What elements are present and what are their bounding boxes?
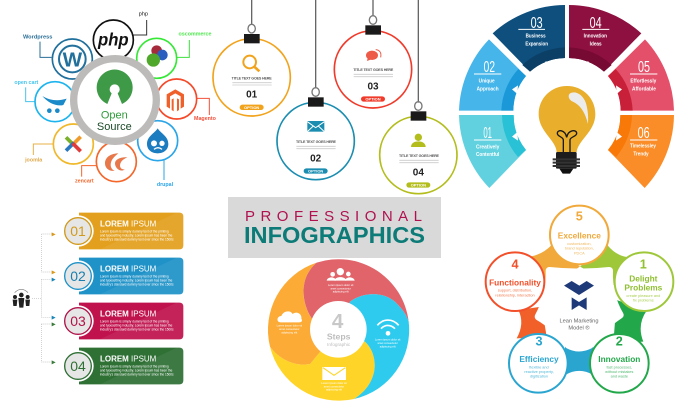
node 5: excellence: brand reputation, [565, 247, 594, 251]
node: wordpress: W [63, 49, 83, 72]
node: open cart: open cart [14, 80, 39, 86]
list item 03: Lorem Ipsum is simply dummy text of the printing [100, 320, 169, 324]
node 4: functionality [486, 252, 544, 311]
list item 01: industry's standard dummy text ever since the 1500s [100, 238, 174, 242]
step: orange cloud: adipiscing elit [281, 330, 298, 334]
list item 03: industry's standard dummy text ever since the 1500s [100, 328, 174, 332]
segment labels: 01 [483, 125, 492, 142]
step: yellow envelope: Lorem ipsum dolor sit [321, 381, 347, 385]
node 4: functionality: 4 [511, 257, 519, 271]
list item 01: LOREM IPSUM [100, 220, 156, 229]
center label: 4 steps [310, 301, 367, 358]
hanging circle 02: TITLE TEXT GOES HERE [296, 140, 337, 144]
segment labels: 04 [590, 15, 602, 32]
node 2: innovation [590, 334, 649, 393]
segment 06 [608, 115, 674, 188]
node: php: php [139, 12, 148, 18]
hanging circle 03 [334, 0, 412, 108]
hanging circle 01: OPTION [244, 105, 259, 110]
segment labels: Approach [477, 86, 499, 92]
segment labels: Expansion [525, 41, 548, 47]
list item 04: Lorem Ipsum is simply dummy text of the printing [100, 365, 169, 369]
segment labels: Innovation [584, 33, 607, 39]
hanging circle 04: 04 [413, 167, 424, 178]
center label: 4 steps: 4 [332, 310, 344, 333]
segment labels: Contentful [476, 152, 500, 158]
step: yellow envelope: adipiscing elit [326, 388, 342, 392]
node 4: functionality: relationship, interaction [495, 293, 535, 297]
node: zencart: zencart [75, 179, 94, 185]
list item 04: LOREM IPSUM [100, 355, 156, 364]
step: yellow envelope: amet consectetur [324, 384, 344, 388]
node 2: innovation: Innovation [598, 354, 640, 364]
segment 04 [569, 5, 641, 72]
node 5: excellence: PDCA [574, 251, 585, 255]
segment labels [474, 15, 657, 158]
hanging circle 04 [380, 0, 457, 194]
node: wordpress: Wordpress [23, 35, 52, 41]
list item 03 [62, 303, 183, 339]
title banner: INFOGRAPHICS [244, 222, 425, 248]
list item 02: 02 [70, 268, 86, 284]
list item 04: industry's standard dummy text ever since the 1500s [100, 373, 174, 377]
hanging circle 04: TITLE TEXT GOES HERE [399, 154, 440, 158]
connector bands [517, 245, 647, 375]
hanging circle 03: TITLE TEXT GOES HERE [353, 68, 394, 72]
segment labels: Timelessley [630, 144, 656, 150]
segment labels: 03 [531, 15, 543, 32]
list item 04 [62, 348, 183, 384]
node: magento: Magento [194, 116, 217, 122]
center: open source badge: Source [97, 121, 132, 133]
list item 02: industry's standard dummy text ever since the 1500s [100, 283, 174, 287]
list item 01: Lorem Ipsum is simply dummy text of the printing [100, 230, 169, 234]
node: oscommerce: oscommerce [179, 31, 211, 37]
segment 01 [459, 115, 526, 188]
hanging circle 02: 02 [310, 153, 322, 164]
segment labels: Creatively [476, 144, 499, 150]
segment labels: Unique [479, 78, 495, 84]
list item 02 [62, 258, 183, 294]
list item 01 [62, 213, 183, 249]
hanging circle 01: TITLE TEXT GOES HERE [232, 76, 272, 80]
segment labels: 06 [638, 125, 650, 142]
list item 03: and typesetting industry. Lorem Ipsum has been the [100, 324, 173, 328]
segment labels: Trendy [633, 152, 649, 158]
segment labels: 05 [638, 59, 650, 76]
list item 03: 03 [70, 313, 86, 329]
step: red people: amet consectetur [330, 286, 351, 290]
node 5: excellence: customization, [567, 242, 592, 246]
segment labels: Business [526, 33, 546, 39]
gear notches [512, 61, 622, 141]
node 3: efficiency: reactive property, [524, 370, 554, 374]
hanging circle 02: OPTION [308, 169, 323, 174]
panel: lean marketing model [486, 206, 673, 393]
node 2: innovation: 2 [616, 334, 623, 348]
node: zencart [75, 142, 136, 185]
center: open source badge: Open [101, 110, 128, 122]
node: joomla [24, 124, 93, 164]
node: php: php [97, 29, 129, 49]
node 1: delight problems: fix problems [633, 299, 654, 303]
node 3: efficiency [509, 334, 568, 393]
center: lean marketing logo: Lean Marketing [559, 319, 598, 325]
node 3: efficiency: 3 [535, 334, 543, 348]
step: yellow envelope [270, 330, 375, 401]
center label: 4 steps: Steps [327, 332, 351, 342]
list item 04: 04 [70, 358, 86, 374]
node 3: efficiency: flexible and [529, 365, 549, 369]
node 1: delight problems [615, 252, 673, 311]
list item 02: LOREM IPSUM [100, 265, 156, 274]
node 5: excellence: Excellence [558, 230, 601, 240]
connector lines [26, 20, 209, 180]
hanging circle 01: 01 [246, 90, 258, 101]
hanging circle 03: 03 [367, 81, 379, 92]
panel: light bulb wheel [459, 5, 674, 188]
step: blue wifi: Lorem ipsum dolor sit [375, 338, 401, 342]
title banner [228, 197, 441, 258]
list item 03: LOREM IPSUM [100, 310, 156, 319]
step: orange cloud [268, 263, 338, 365]
node 5: excellence: 5 [576, 210, 583, 224]
node: open cart [14, 80, 75, 122]
node 1: delight problems: Problems [624, 283, 663, 293]
segment 03 [493, 5, 565, 72]
step: blue wifi: adipiscing elit [380, 344, 396, 348]
step: orange cloud: Lorem ipsum dolor sit [277, 324, 302, 328]
people icon and connector lines [13, 232, 56, 364]
segment 02 [459, 39, 526, 111]
node 2: innovation: and waste [611, 375, 628, 379]
node 3: efficiency: Efficiency [519, 354, 559, 364]
list item 02: and typesetting industry. Lorem Ipsum has been the [100, 279, 173, 283]
segment labels: 02 [484, 59, 495, 76]
node 4: functionality: support, distribution, [498, 289, 532, 293]
icon: light bulb [539, 86, 595, 174]
node 1: delight problems: Delight [629, 273, 658, 283]
node: php [93, 12, 148, 60]
step: orange cloud: amet consectetur [279, 327, 300, 331]
hanging circle 03: OPTION [365, 97, 381, 102]
node: magento [157, 79, 217, 122]
node 1: delight problems: create pleasure and [626, 294, 660, 298]
node: wordpress [23, 35, 92, 79]
node: joomla: joomla [24, 157, 42, 163]
panel: numbered lorem ipsum list [13, 213, 183, 384]
list item 01: and typesetting industry. Lorem Ipsum has been the [100, 234, 173, 238]
segment labels: Effortlessly [630, 78, 656, 84]
center: lean marketing logo: Model ® [568, 325, 590, 332]
list item 04: and typesetting industry. Lorem Ipsum has been the [100, 369, 173, 373]
center label: 4 steps: Infographic [327, 342, 351, 347]
node: oscommerce [137, 31, 211, 78]
node 5: excellence [550, 206, 609, 264]
step: blue wifi: amet consectetur [377, 341, 398, 345]
title banner: PROFESSIONAL [245, 208, 422, 225]
node: drupal [138, 121, 178, 188]
hanging circle 02 [277, 0, 354, 180]
step: red people: adipiscing elit [333, 290, 349, 294]
hanging circle 04: OPTION [411, 183, 426, 188]
segment labels: Ideas [590, 41, 602, 47]
node 2: innovation: fast processes, [606, 365, 632, 369]
segment labels: Affordable [632, 86, 656, 92]
center: open source badge [70, 55, 160, 145]
panel: hanging circles [213, 0, 457, 194]
center: lean marketing logo [559, 281, 598, 332]
segment 05 [608, 39, 674, 111]
node 2: innovation: without mistakes [605, 370, 634, 374]
list item 02: Lorem Ipsum is simply dummy text of the printing [100, 275, 169, 279]
panel: open source hub [14, 12, 217, 188]
hanging circle 01 [213, 0, 290, 116]
step: blue wifi [338, 294, 409, 399]
node: drupal: drupal [157, 182, 174, 188]
step: red people [304, 259, 409, 330]
step: red people: Lorem ipsum dolor sit [328, 283, 354, 287]
node 4: functionality: Functionality [489, 277, 541, 287]
panel: 4 steps swirl chart [268, 259, 409, 401]
node 3: efficiency: digitization [530, 375, 548, 379]
node 1: delight problems: 1 [640, 257, 647, 271]
list item 01: 01 [70, 223, 86, 239]
